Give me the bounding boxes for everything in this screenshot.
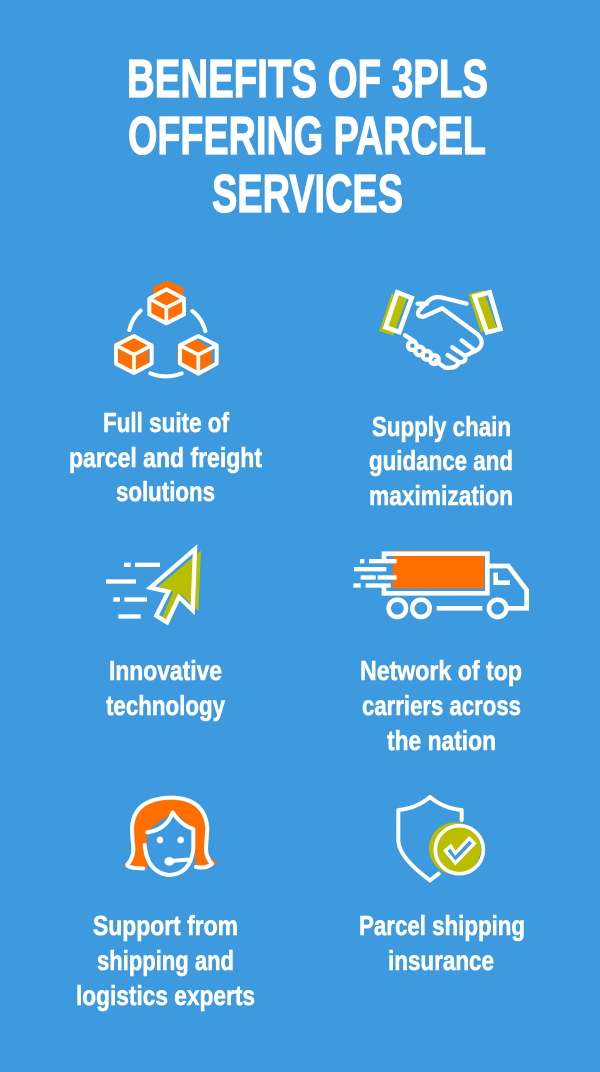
label: full suite — [69, 407, 262, 507]
label: support from experts: Support from — [93, 910, 238, 941]
label: innovative technology — [106, 655, 225, 721]
label: network of carriers: Network of top — [360, 655, 522, 686]
label: supply chain: Supply chain — [372, 411, 511, 442]
icon: support agent with headset — [123, 797, 217, 875]
title: SERVICES — [212, 164, 403, 224]
label: supply chain — [369, 411, 513, 511]
label: supply chain: guidance and — [369, 445, 513, 476]
label: network of carriers — [360, 655, 522, 756]
label: support from experts: logistics experts — [76, 980, 255, 1011]
icon: three connected cubes — [114, 281, 217, 376]
label: full suite: Full suite of — [103, 407, 230, 438]
title — [127, 49, 488, 224]
label: parcel shipping insurance — [359, 910, 525, 976]
icon: handshake — [379, 290, 500, 368]
label: full suite: parcel and freight — [69, 442, 262, 473]
label: parcel shipping insurance: insurance — [388, 945, 494, 976]
label: support from experts — [76, 910, 255, 1011]
icon: cursor arrow with speed lines — [106, 549, 201, 622]
label: innovative technology: Innovative — [109, 655, 222, 686]
label: network of carriers: the nation — [387, 725, 496, 756]
label: full suite: solutions — [116, 476, 215, 507]
icon: delivery truck — [353, 551, 527, 617]
label: support from experts: shipping and — [97, 945, 234, 976]
label: parcel shipping insurance: Parcel shipping — [359, 910, 525, 941]
label: supply chain: maximization — [369, 480, 513, 511]
label: network of carriers: carriers across — [362, 690, 521, 721]
icon: shield with check — [398, 797, 483, 880]
label: innovative technology: technology — [106, 690, 225, 721]
